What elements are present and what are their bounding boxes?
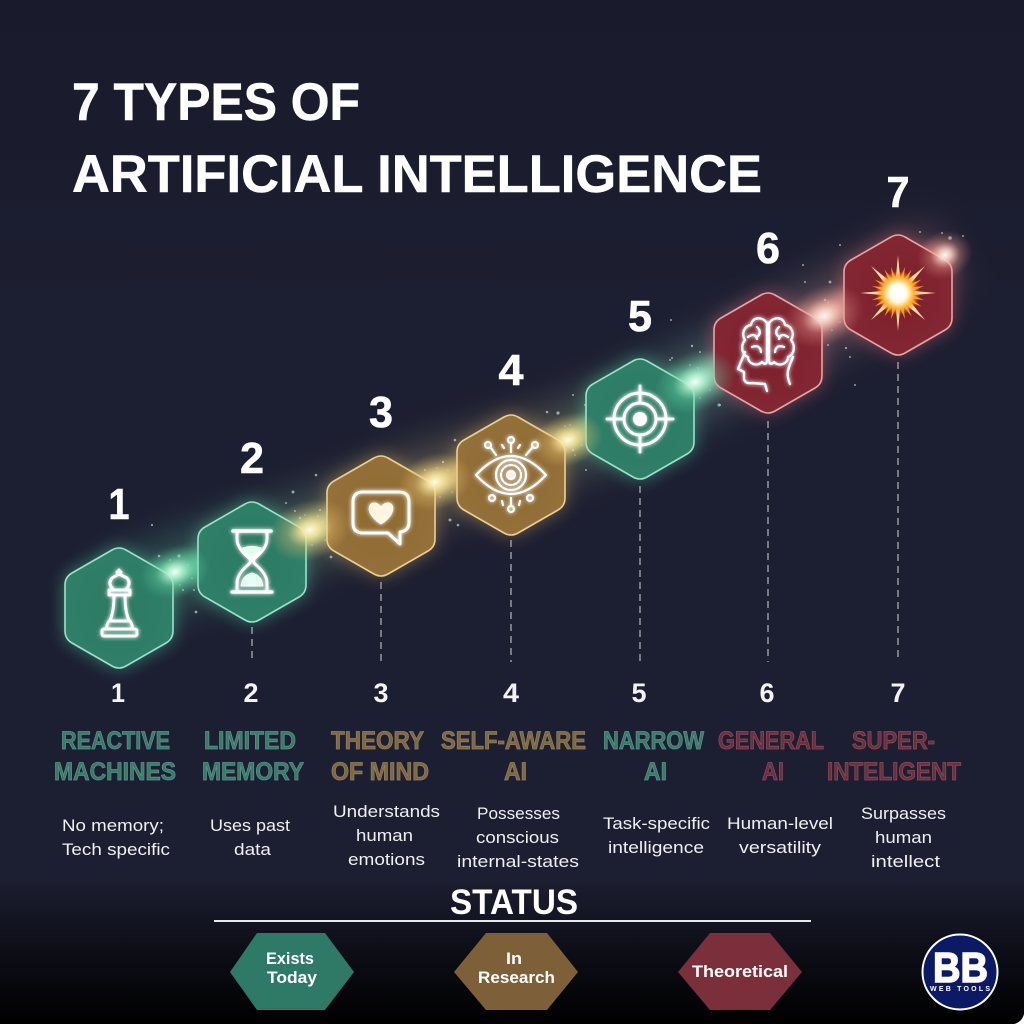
glowing progress streak <box>119 231 964 613</box>
type names: MACHINES <box>54 758 176 786</box>
step numbers above hexagons: 4 <box>498 346 524 395</box>
type descriptions: human <box>875 828 932 847</box>
numbers above labels: 7 <box>890 678 906 708</box>
step 4: self-aware AI hexagon <box>457 415 565 535</box>
step 3: theory of mind hexagon <box>327 456 435 576</box>
type descriptions: data <box>234 840 272 859</box>
dashed leader lines <box>252 362 898 662</box>
glow bursts between hexagons <box>133 222 980 608</box>
step numbers above hexagons: 6 <box>756 224 780 273</box>
step numbers above hexagons: 5 <box>628 292 652 341</box>
numbers above labels: 5 <box>632 678 646 708</box>
type descriptions: Tech specific <box>62 840 171 859</box>
step 1: reactive machines hexagon <box>65 548 173 668</box>
type descriptions: conscious <box>476 828 559 847</box>
icon: starburst <box>860 255 936 331</box>
numbers above labels: 3 <box>374 678 388 708</box>
type names: LIMITED <box>204 727 296 755</box>
type descriptions: intelligence <box>608 838 704 857</box>
title <box>72 73 762 204</box>
type names: GENERAL <box>718 727 824 755</box>
icon: head with brain <box>738 318 794 391</box>
type descriptions: Task-specific <box>603 814 711 833</box>
type names: SELF-AWARE <box>441 727 586 755</box>
type descriptions: internal-states <box>457 852 579 871</box>
legend: in research: In <box>506 949 522 968</box>
step 2: limited memory hexagon <box>198 502 306 622</box>
numbers above labels <box>111 678 906 708</box>
numbers above labels: 4 <box>503 678 519 708</box>
legend: exists today: Exists <box>266 949 314 968</box>
type descriptions: No memory; <box>62 816 164 835</box>
step 7: super-intelligent hexagon <box>844 235 952 355</box>
step numbers above hexagons: 3 <box>369 388 393 437</box>
title: 7 TYPES OF <box>72 73 360 132</box>
step numbers above hexagons <box>108 168 910 529</box>
step numbers above hexagons: 7 <box>886 168 910 217</box>
type descriptions: Possesses <box>477 804 560 823</box>
legend: theoretical: Theoretical <box>692 962 788 981</box>
logo: BB web tools: WEB TOOLS <box>930 986 990 993</box>
type descriptions: Surpasses <box>861 804 946 823</box>
icon: speech bubble with heart <box>353 492 409 544</box>
icon: chess piece <box>102 570 137 636</box>
type names: OF MIND <box>331 758 429 786</box>
type names: REACTIVE <box>61 727 170 755</box>
legend: in research: Research <box>478 968 555 987</box>
legend: in research <box>454 933 578 1010</box>
numbers above labels: 2 <box>244 678 258 708</box>
type names: AI <box>762 758 784 786</box>
icon: target <box>607 386 673 452</box>
numbers above labels: 6 <box>760 678 774 708</box>
icon: eye with nodes <box>476 437 546 512</box>
type names: INTELIGENT <box>827 758 961 786</box>
legend: exists today: Today <box>267 968 318 987</box>
type names: AI <box>644 758 667 786</box>
type descriptions: Understands <box>333 802 440 821</box>
icon: hourglass <box>232 531 272 592</box>
particles <box>149 231 964 613</box>
type names: AI <box>504 758 527 786</box>
legend: exists today <box>230 933 354 1010</box>
type descriptions: Uses past <box>210 816 290 835</box>
legend: theoretical <box>678 933 802 1010</box>
logo: BB web tools <box>922 934 998 1010</box>
type descriptions <box>62 802 946 871</box>
type names: SUPER- <box>852 727 935 755</box>
type descriptions: intellect <box>871 852 940 871</box>
type names: THEORY <box>331 727 424 755</box>
numbers above labels: 1 <box>111 678 125 708</box>
type descriptions: emotions <box>348 850 425 869</box>
type names <box>54 727 961 786</box>
type descriptions: human <box>356 826 413 845</box>
type names: NARROW <box>603 727 704 755</box>
step numbers above hexagons: 2 <box>240 434 264 483</box>
step 6: general AI hexagon <box>714 293 822 413</box>
type descriptions: versatility <box>739 838 822 857</box>
type names: MEMORY <box>202 758 304 786</box>
logo: BB web tools: BB <box>933 944 988 991</box>
status heading: STATUS <box>450 883 578 922</box>
title: ARTIFICIAL INTELLIGENCE <box>72 145 762 204</box>
step 5: narrow AI hexagon <box>586 359 694 479</box>
type descriptions: Human-level <box>727 814 833 833</box>
step numbers above hexagons: 1 <box>108 480 130 529</box>
